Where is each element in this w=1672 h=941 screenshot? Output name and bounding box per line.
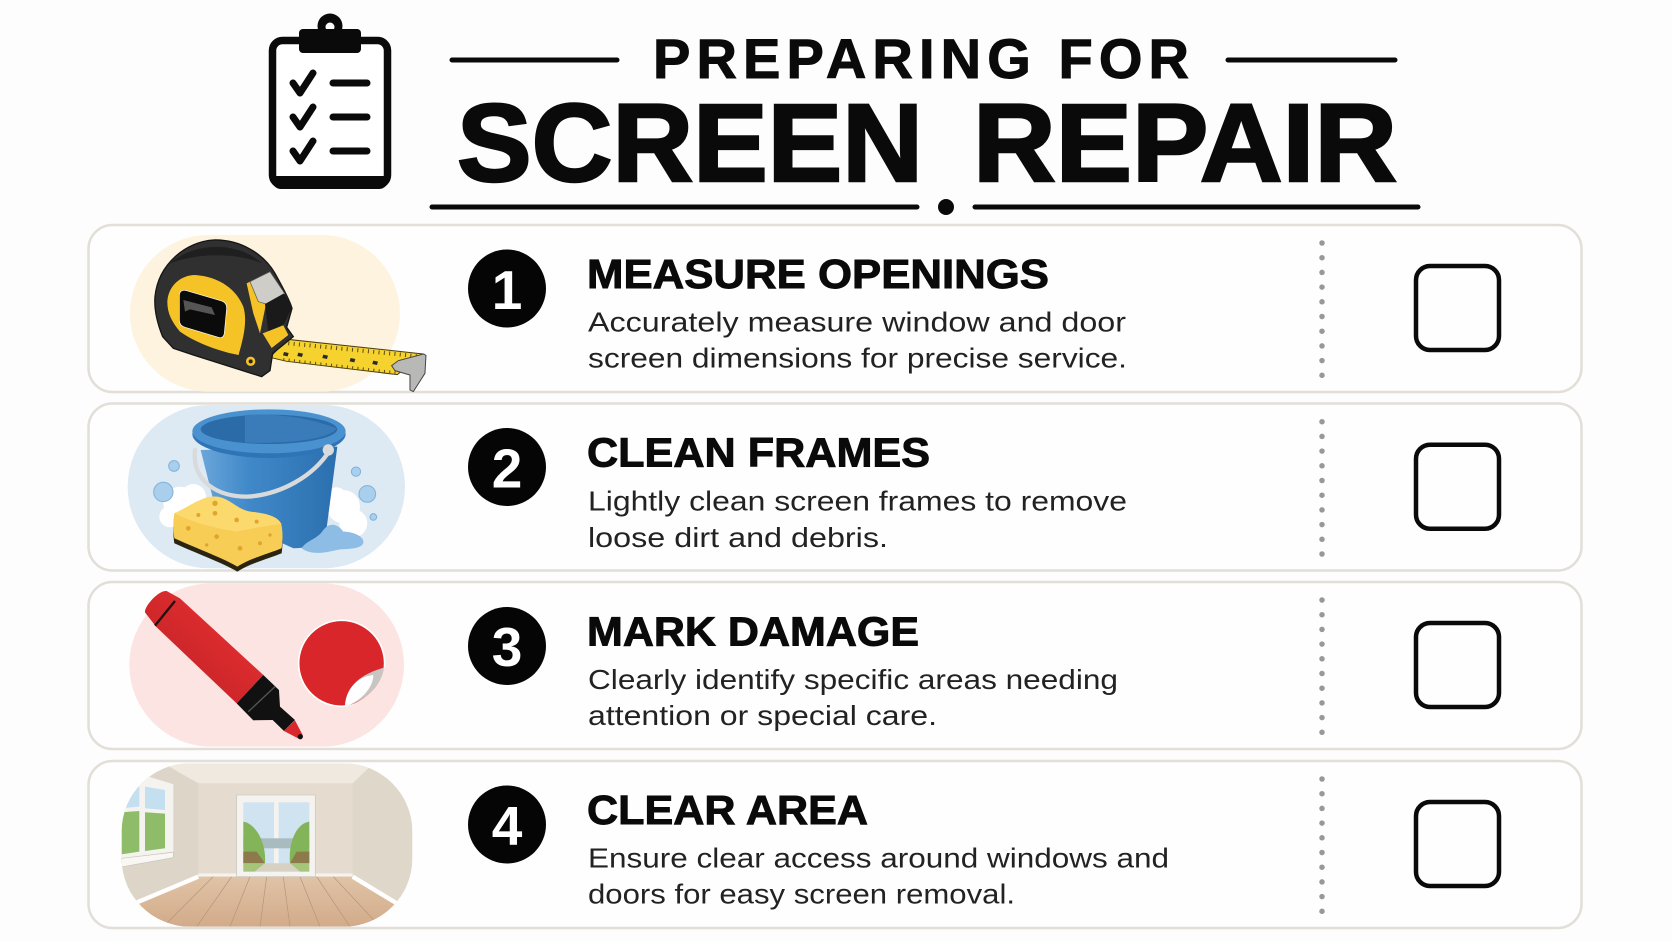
step number 4: 4 [492,794,523,856]
step text 2 [587,430,1127,553]
dotted divider [1319,243,1325,376]
step text 2: CLEAN FRAMES [587,430,930,476]
title: screen repair [457,82,1397,205]
step text 3: attention or special care. [588,700,937,731]
step text 4: CLEAR AREA [587,787,868,833]
checkbox [1416,623,1499,707]
step text 4 [587,787,1169,910]
step text 4: doors for easy screen removal. [588,878,1015,910]
divider with dot [432,199,1418,215]
step text 2: loose dirt and debris. [588,522,888,553]
step number 2: 2 [492,438,522,500]
panel: step 2 clean frames [88,404,1582,572]
step number 3: 3 [492,616,522,678]
title: screen repair: REPAIR [973,82,1397,205]
step text 1: MEASURE OPENINGS [587,251,1049,297]
icon: marker and sticker [129,583,404,747]
step number 1 [468,250,546,328]
header [272,14,1418,215]
panel: step 1 measure openings [88,225,1582,392]
dotted divider [1319,422,1325,555]
icon: clipboard checklist [272,14,388,189]
checkbox [1416,266,1499,350]
checkbox [1416,445,1499,529]
step text 1: Accurately measure window and door [588,306,1126,338]
step text 3: Clearly identify specific areas needing [588,664,1118,695]
step text 1 [587,251,1127,374]
icon: empty room [122,763,412,927]
step number 1: 1 [492,259,522,321]
step text 3 [587,608,1118,731]
panel: step 3 mark damage [88,582,1582,749]
icon: tape measure [130,235,426,392]
step text 4: Ensure clear access around windows and [588,842,1169,874]
step number 2 [468,428,546,506]
step text 1: screen dimensions for precise service. [588,342,1127,374]
dotted divider [1319,600,1325,733]
title line: preparing for: PREPARING FOR [653,27,1189,90]
step number 4 [468,786,546,864]
title: screen repair: SCREEN [457,82,923,205]
step text 3: MARK DAMAGE [587,608,919,654]
checkbox [1416,802,1499,886]
dotted divider [1319,779,1325,912]
step number 3 [468,607,546,685]
icon: bucket and sponge [128,405,405,572]
step text 2: Lightly clean screen frames to remove [588,486,1127,517]
panel: step 4 clear area [88,761,1582,928]
